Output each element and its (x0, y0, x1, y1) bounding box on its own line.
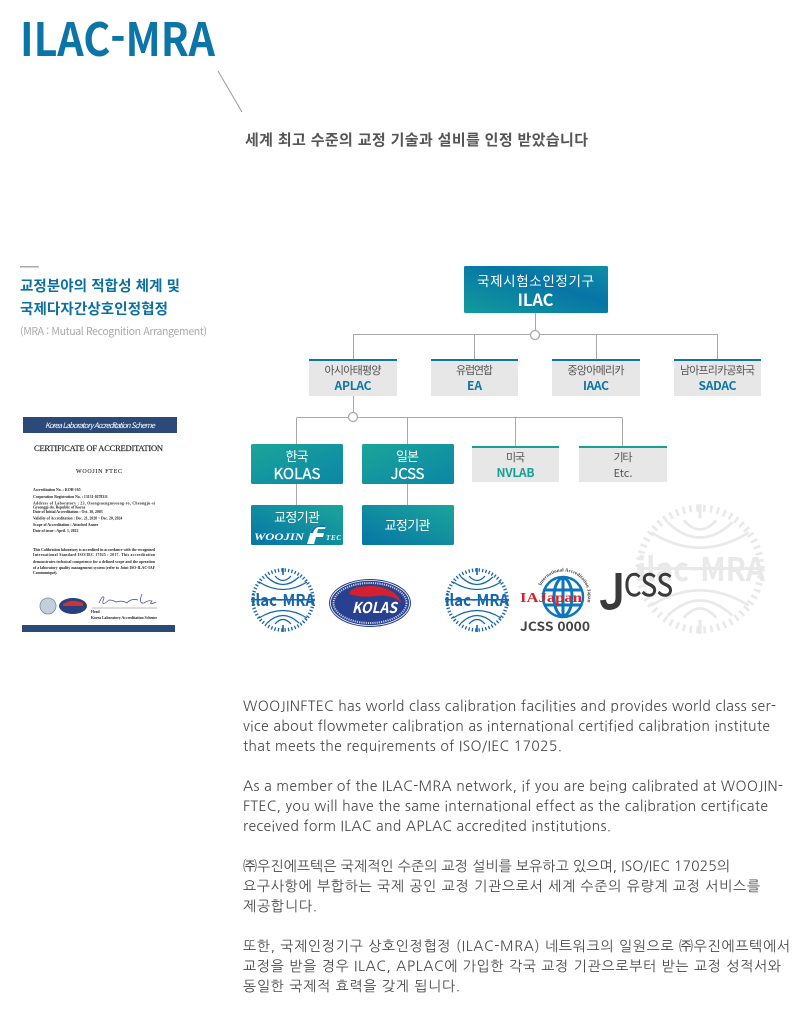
node: JCSS (362, 444, 454, 484)
body text: English and Korean description: 또한, 국제인정기구 상호인정협정 (ILAC-MRA) 네트워크의 일원으로 ㈜우진에프텍에서 (243, 939, 790, 954)
logo: JCSS: CSS (624, 560, 673, 605)
node: APLAC (309, 359, 397, 396)
node: calibration body WOOJIN FTEC: TEC (326, 534, 341, 542)
body text: English and Korean description: FTEC, you will have the same international effect as the calibration certificate (243, 799, 768, 814)
section heading: 국제다자간상호인정협정 (20, 298, 168, 319)
certificate of accreditation (16, 405, 181, 637)
logo: IAJapan (520, 568, 591, 635)
subtitle: 세계 최고 수준의 교정 기술과 설비를 인정 받았습니다 (245, 129, 588, 150)
logo: IAJapan: IAJapan (520, 591, 582, 606)
body text: English and Korean description: As a member of the ILAC-MRA network, if you are being calibrated at WOOJIN- (243, 779, 783, 794)
node: calibration body Japan (362, 505, 454, 545)
watermark: ILAC-MRA emblem (637, 504, 765, 634)
node: Etc. (579, 446, 667, 482)
org chart connectors (296, 313, 718, 505)
logo: JCSS (603, 560, 673, 607)
logo: ILAC-MRA emblem (Japan) (445, 568, 510, 632)
logo: IAJapan: JCSS 0000 (520, 616, 590, 635)
node: KOLAS (251, 444, 343, 484)
logo: ILAC-MRA emblem (Korea) (251, 568, 316, 632)
body text: English and Korean description: that meets the requirements of ISO/IEC 17025. (243, 739, 562, 754)
logo: KOLAS (329, 579, 411, 627)
watermark: ILAC-MRA emblem: ilac-MRA (637, 544, 765, 591)
node: EA: EA (467, 377, 482, 394)
node: calibration body WOOJIN FTEC (251, 505, 343, 545)
node: Etc.: Etc. (614, 465, 632, 481)
node: Etc.: 기타 (614, 449, 632, 465)
certificate of accreditation: Gyeonggi-do, Republic of Korea (33, 506, 85, 510)
certificate of accreditation: demonstrates technical competence for a defined scope and the operation (33, 560, 156, 564)
body text: English and Korean description (243, 699, 790, 994)
node: JCSS: 일본 (396, 446, 419, 465)
node: ILAC: 국제시험소인정기구 (477, 270, 594, 290)
logo: IAJapan: International Accreditation Japan (538, 568, 591, 602)
certificate of accreditation: Date of issue : April. 1, 2022 (33, 529, 78, 533)
certificate of accreditation: Address of Laboratory : 23, Osongsaengmyeong-ro, Cheongju-si (33, 502, 155, 506)
certificate of accreditation: CERTIFICATE OF ACCREDITATION (34, 443, 163, 453)
node: NVLAB (472, 446, 559, 482)
node: ILAC: ILAC (518, 287, 554, 311)
title: ILAC-MRA (20, 4, 215, 70)
certificate of accreditation: This Calibration laboratory is accredited in accordance with the recognized (33, 548, 156, 552)
certificate of accreditation: Validity of Accreditation : Dec. 21, 2020 ~ Dec. 20, 2024 (33, 516, 122, 520)
node: IAAC: IAAC (583, 377, 609, 394)
body text: English and Korean description: received form ILAC and APLAC accredited institutions. (243, 819, 611, 834)
diagonal accent line (218, 71, 242, 112)
body text: English and Korean description: WOOJINFTEC has world class calibration facilities and provides world class ser- (243, 699, 776, 714)
certificate of accreditation: Communiqué). (33, 571, 57, 575)
node: calibration body Japan: 교정기관 (384, 515, 431, 534)
node: EA (431, 359, 518, 396)
node: KOLAS: KOLAS (274, 463, 321, 484)
node: NVLAB: NVLAB (496, 464, 534, 481)
node: APLAC: 아시아태평양 (324, 362, 382, 378)
node: SADAC: SADAC (698, 377, 737, 394)
body text: English and Korean description: 제공합니다. (243, 899, 317, 914)
certificate of accreditation: Corporation Registration No. : 13131-0278311 (33, 495, 108, 499)
node: EA: 유럽연합 (456, 362, 493, 378)
section heading: 교정분야의 적합성 체계 및 (20, 275, 180, 296)
node: calibration body WOOJIN FTEC: 교정기관 (274, 507, 320, 526)
node: IAAC: 중앙아메리카 (568, 362, 624, 378)
node: JCSS: JCSS (390, 463, 425, 484)
logo: ILAC-MRA emblem (Korea): ilac-MRA (251, 587, 316, 611)
node: calibration body WOOJIN FTEC: WOOJIN (254, 533, 306, 543)
node: ILAC (464, 266, 608, 313)
certificate of accreditation: Date of Initial Accreditation : Oct. 30, 2003 (33, 510, 103, 514)
node: APLAC: APLAC (334, 377, 372, 394)
certificate of accreditation: of a laboratory quality management system (refer to Joint ISO-ILAC-IAF (33, 566, 156, 570)
body text: English and Korean description: 교정을 받을 경우 ILAC, APLAC에 가입한 각국 교정 기관으로부터 받는 교정 성적서와 (243, 959, 782, 974)
certificate of accreditation: Accreditation No. : KOH-165 (33, 488, 81, 492)
logo: KOLAS: KOLAS (352, 597, 398, 618)
certificate of accreditation: Korea Laboratory Accreditation Scheme (45, 420, 156, 431)
node: IAAC (552, 359, 640, 396)
certificate of accreditation: Scope of Accreditation : Attached Annex (33, 523, 99, 527)
node: SADAC (674, 359, 761, 396)
node: SADAC: 남아프리카공화국 (680, 362, 755, 378)
certificate of accreditation: Head (91, 610, 101, 614)
certificate of accreditation: International Standard ISO/IEC 17025 : 2017. This accreditation (33, 553, 156, 557)
certificate of accreditation: WOOJIN FTEC (76, 469, 122, 475)
section heading: (MRA : Mutual Recognition Arrangement) (20, 324, 207, 339)
body text: English and Korean description: ㈜우진에프텍은 국제적인 수준의 교정 설비를 보유하고 있으며, ISO/IEC 17025의 (243, 859, 730, 874)
body text: English and Korean description: 동일한 국제적 효력을 갖게 됩니다. (243, 979, 460, 994)
body text: English and Korean description: 요구사항에 부합하는 국제 공인 교정 기관으로서 세계 수준의 유량계 교정 서비스를 (243, 879, 760, 894)
node: NVLAB: 미국 (506, 449, 525, 465)
logo: ILAC-MRA emblem (Japan): ilac-MRA (445, 587, 510, 611)
node: KOLAS: 한국 (286, 446, 309, 465)
certificate of accreditation: Korea Laboratory Accreditation Scheme (91, 616, 157, 620)
section heading (20, 266, 207, 339)
body text: English and Korean description: vice about flowmeter calibration as international certified calibration institute (243, 719, 770, 734)
